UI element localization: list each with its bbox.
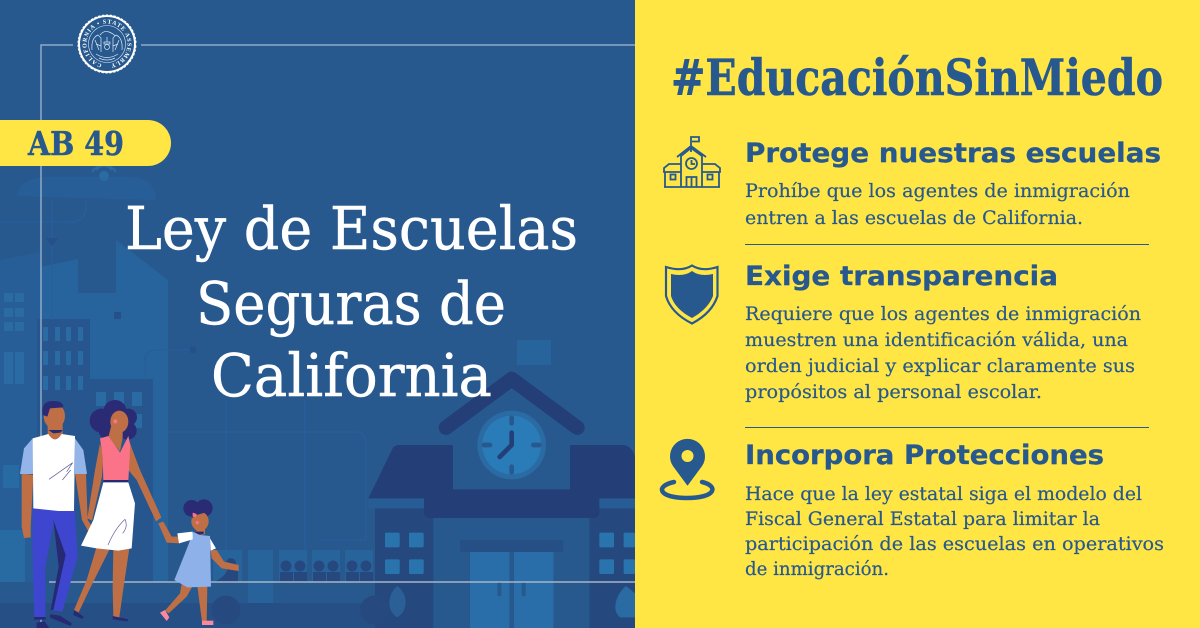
panel: blue background [0, 14, 635, 628]
icon: map pin [662, 439, 712, 498]
badge: AB 49 [0, 120, 171, 166]
description: propósitos al personal escolar. [745, 381, 1042, 403]
icon: school [664, 137, 720, 187]
woman [73, 400, 161, 621]
icon: shield [666, 266, 718, 324]
ground band [0, 603, 635, 628]
heading: Incorpora Protecciones [745, 440, 1104, 471]
illustration: family walking [20, 400, 239, 628]
seal: California State Assembly [78, 14, 136, 74]
ball [212, 596, 240, 624]
title [125, 194, 578, 410]
heading: Exige transparencia [745, 261, 1058, 292]
description [745, 483, 1164, 580]
man [20, 401, 93, 628]
description: de inmigración. [745, 558, 889, 580]
title: Seguras de [196, 269, 506, 338]
description: Requiere que los agentes de inmigración [745, 303, 1141, 325]
girl [158, 499, 239, 625]
badge: AB 49: AB 49 [27, 124, 124, 163]
city skyline illustration [0, 165, 551, 628]
description [745, 180, 1130, 229]
frame lines [41, 45, 635, 628]
item: exige transparencia [666, 261, 1141, 403]
panel: yellow benefits [635, 0, 1200, 628]
description: Hace que la ley estatal siga el modelo del [745, 483, 1142, 505]
title: California [211, 341, 492, 410]
description: participación de las escuelas en operativos [745, 533, 1164, 555]
description: orden judicial y explicar claramente sus [745, 355, 1135, 377]
description: Fiscal General Estatal para limitar la [745, 508, 1100, 530]
item: protege nuestras escuelas [664, 137, 1161, 229]
title: Ley de Escuelas [125, 194, 578, 263]
school building with clock [360, 379, 635, 628]
item: incorpora protecciones [662, 439, 1164, 580]
description: entren a las escuelas de California. [745, 207, 1083, 229]
description: muestren una identificación válida, una [745, 329, 1128, 351]
classroom windows with silhouettes [213, 550, 395, 628]
description [745, 303, 1141, 403]
heading: Protege nuestras escuelas [745, 138, 1161, 169]
description: Prohíbe que los agentes de inmigración [745, 180, 1130, 202]
